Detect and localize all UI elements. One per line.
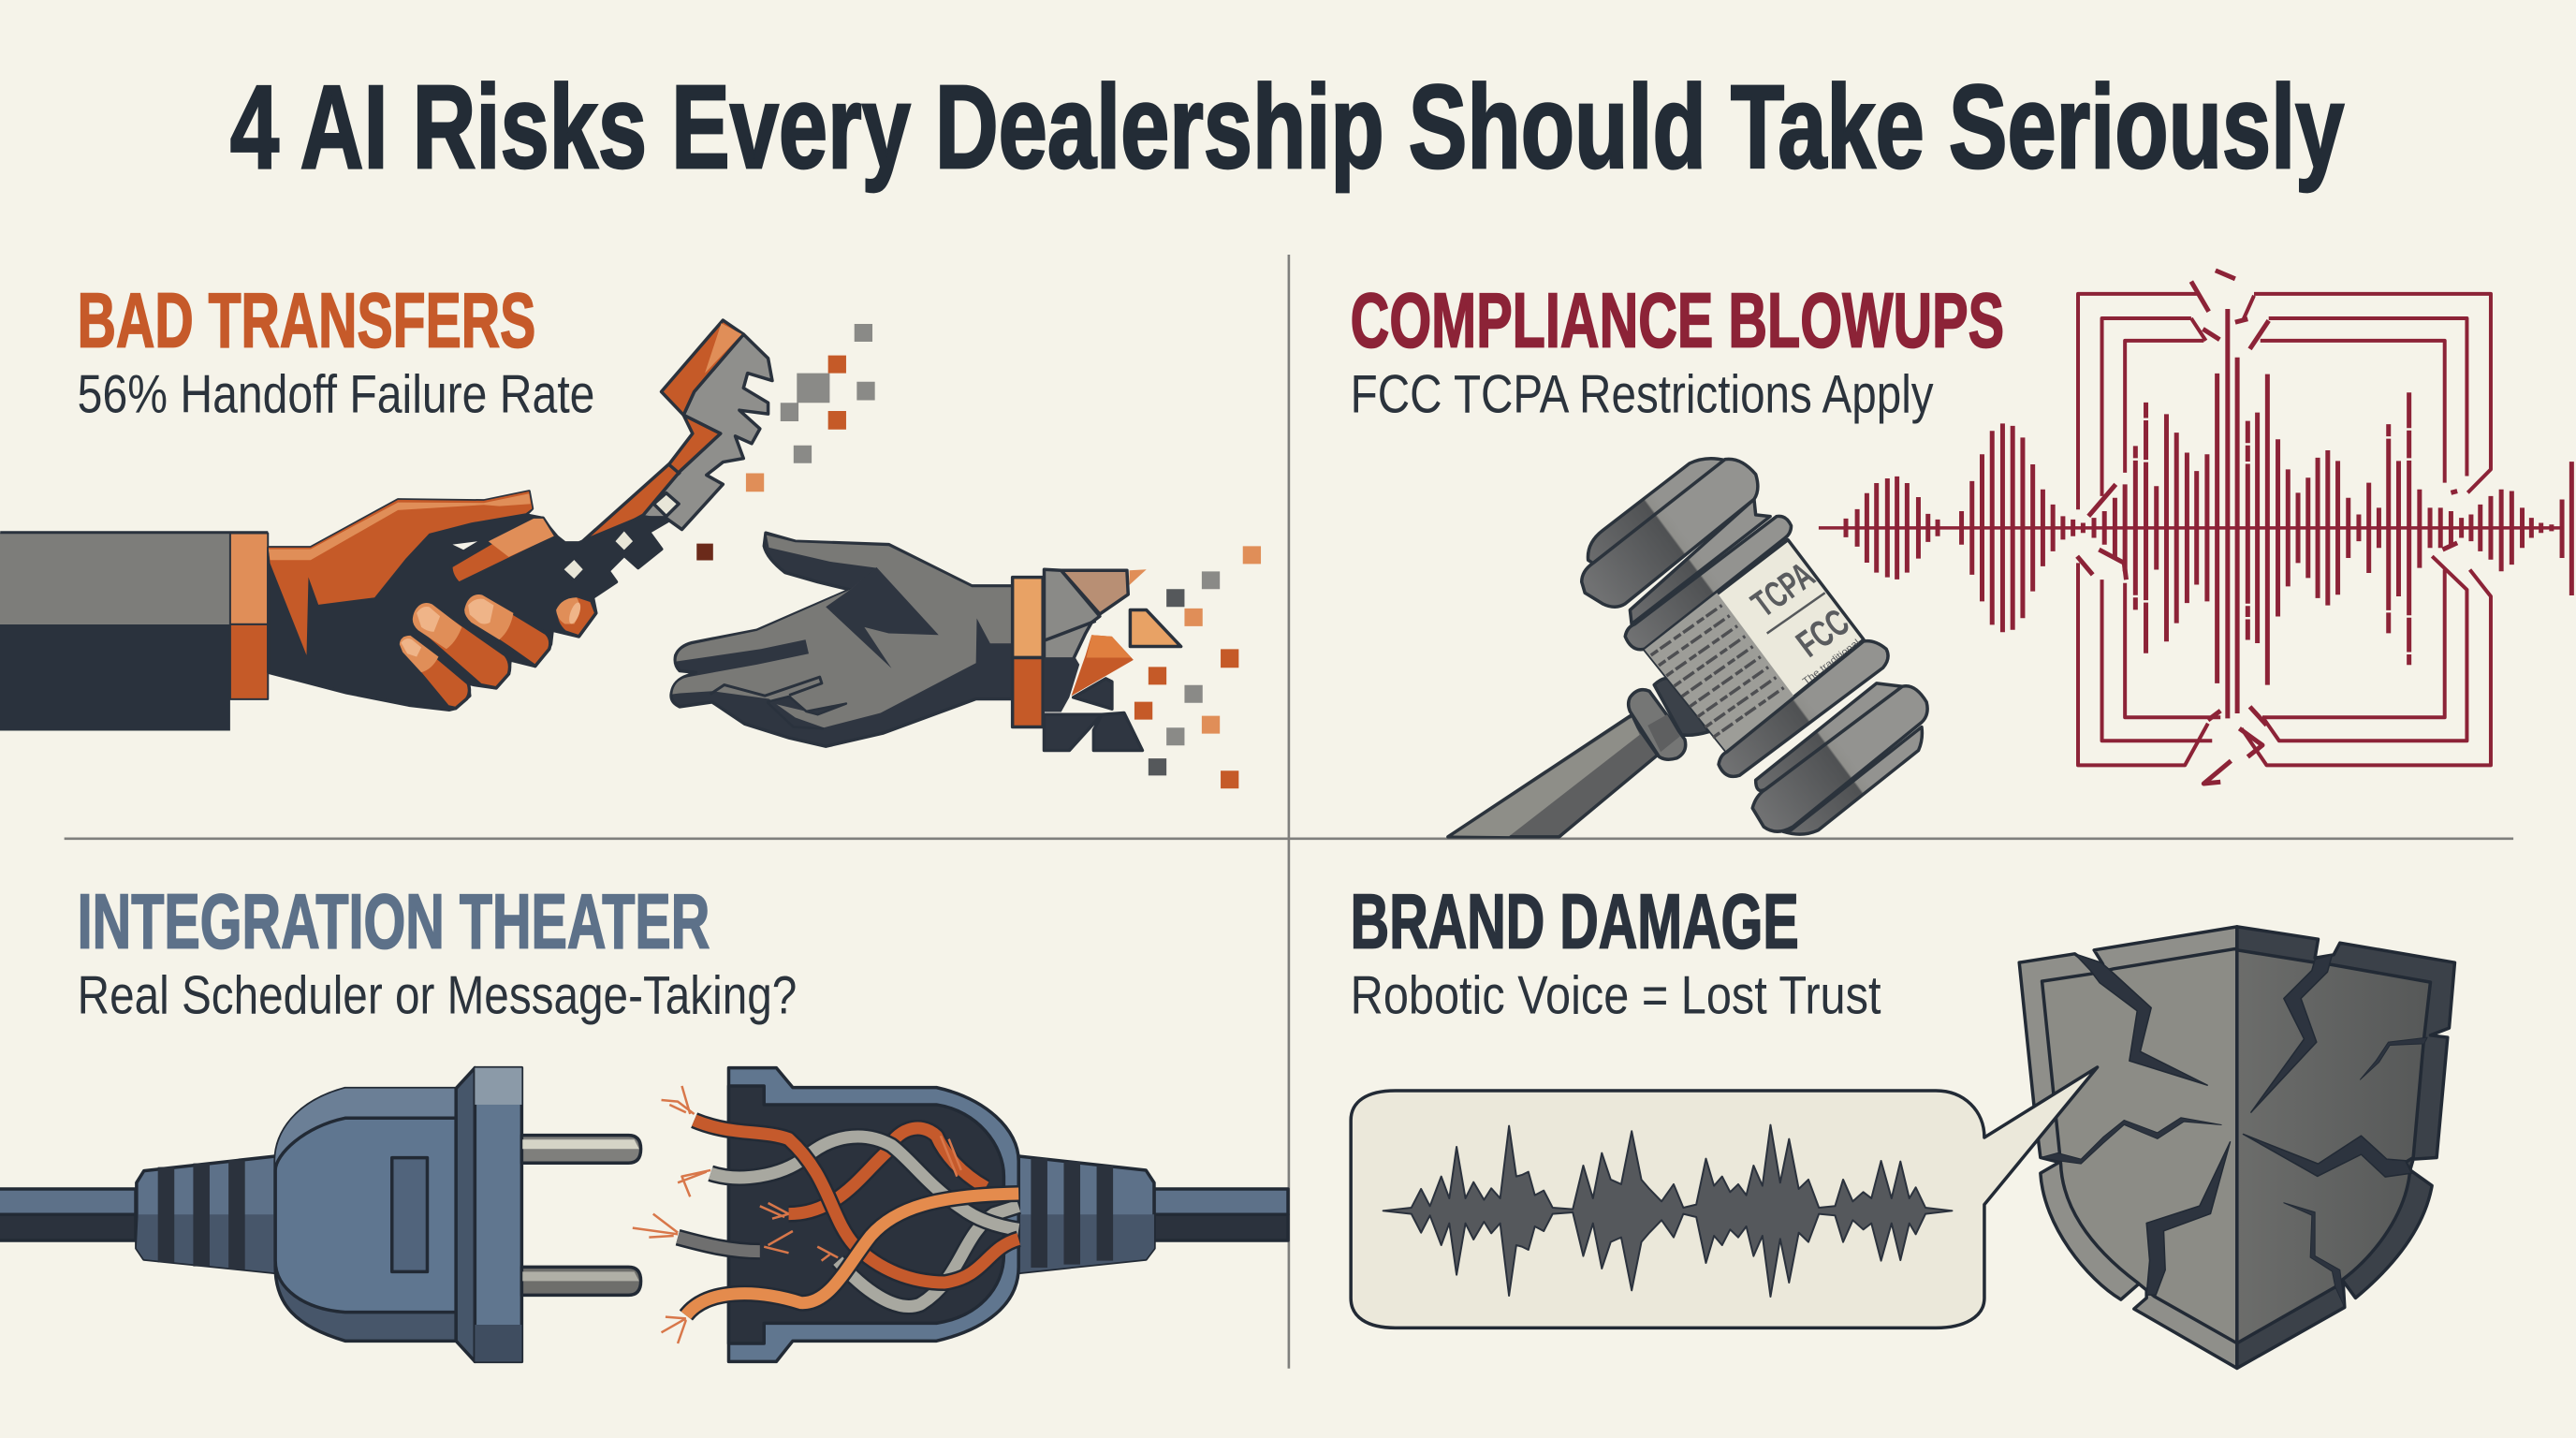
subheading: robotic voice: Robotic Voice = Lost Trust: [1351, 966, 1881, 1026]
heading: compliance blowups: COMPLIANCE BLOWUPS: [1351, 277, 2004, 363]
heading: integration theater: INTEGRATION THEATER: [78, 879, 710, 965]
illustration: cracked shield and speech bubble: [1351, 927, 2454, 1368]
chart: robotic voice waveform: [1383, 1125, 1952, 1297]
panel: bad transfers: [0, 277, 1261, 788]
icon: right hand reaching: [671, 533, 1013, 746]
subheading: real scheduler: Real Scheduler or Message-Taking?: [78, 966, 797, 1026]
icon: left hand holding handset: [269, 465, 681, 710]
icon: left sleeve: [0, 533, 268, 730]
gavel label text: TCPA: [1744, 555, 1822, 625]
gavel label text: The traditional: [1801, 638, 1862, 687]
icon: gavel lower cap: [1719, 641, 1927, 834]
illustration: broken phone handoff: [0, 320, 1261, 788]
bubble and waveform: [1351, 1067, 2098, 1328]
gavel label text: FCC: [1788, 600, 1857, 665]
icon: disintegrating handset: [582, 320, 772, 543]
icon: gavel with tcpa fcc label: [1448, 459, 1927, 837]
icon: gavel handle: [1448, 678, 1709, 837]
chart: waveform: [1819, 309, 2571, 718]
icon: broken frame: [2077, 271, 2491, 784]
subheading: handoff failure rate: 56% Handoff Failure Rate: [78, 364, 594, 424]
panel: brand damage: [1351, 879, 2454, 1368]
icon: tangled wires: [633, 1086, 1018, 1343]
heading: bad transfers: BAD TRANSFERS: [78, 277, 535, 363]
icon: cracked shield: [2019, 927, 2454, 1368]
subheading: fcc tcpa restrictions: FCC TCPA Restrictions Apply: [1351, 364, 1934, 424]
panel: compliance blowups: [1351, 271, 2571, 837]
heading: brand damage: BRAND DAMAGE: [1351, 879, 1799, 965]
icon: plug: [0, 1068, 641, 1361]
icon: gavel upper cap: [1582, 459, 1792, 650]
icon: shattered right sleeve: [1013, 569, 1181, 751]
icon: open socket: [728, 1068, 1288, 1361]
icon: sleeve, handset, pixels and right hand base: [0, 320, 1261, 788]
illustration: waveform and broken frame: [1819, 271, 2571, 784]
gavel label fine print: [1645, 593, 1825, 752]
gavel label text: [1749, 564, 1859, 683]
illustration: plug and frayed socket: [0, 1068, 1288, 1361]
callout: speech bubble: [1351, 1067, 2098, 1328]
gavel label panel: [1645, 540, 1864, 752]
panel: integration theater: [0, 879, 1288, 1361]
icon: scattered pixels: [696, 324, 1261, 788]
